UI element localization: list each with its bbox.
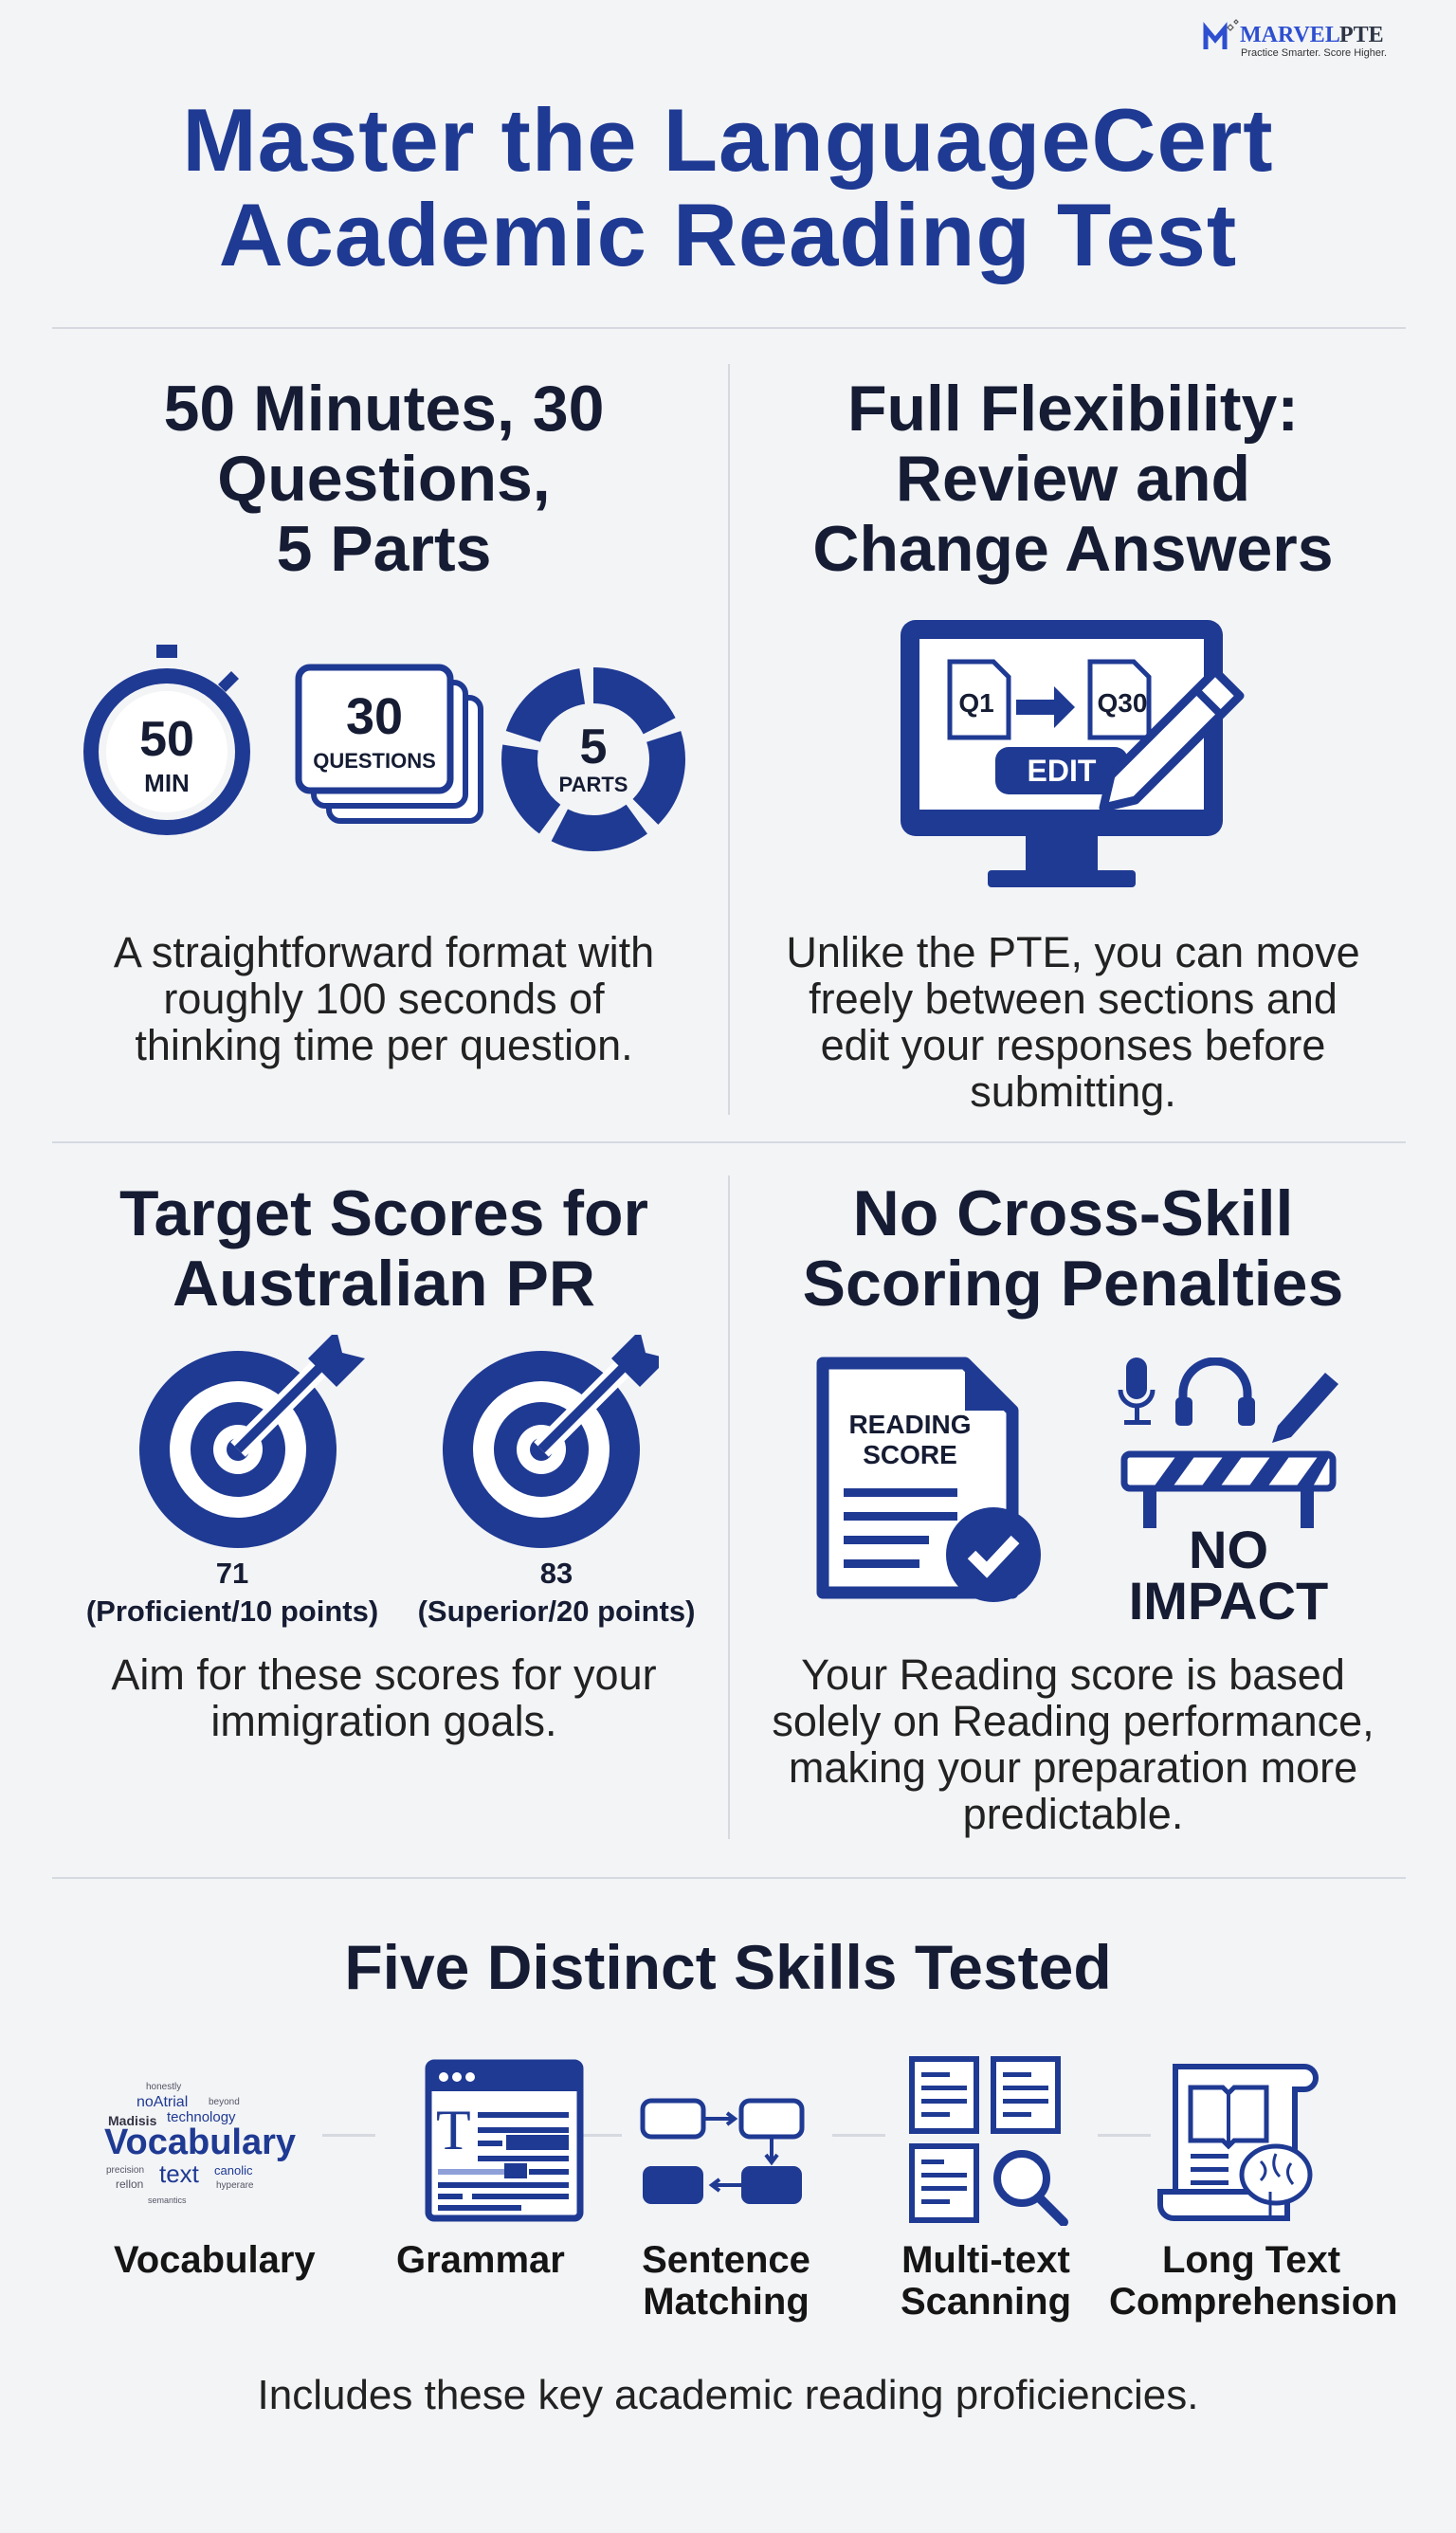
icon: reading score document: SCORE — [863, 1440, 957, 1469]
skills row: Matching — [643, 2281, 810, 2323]
icon: reading score document: READING — [848, 1410, 972, 1439]
icon: monitor — [901, 620, 1244, 887]
heading: format: 50 Minutes, 30 — [164, 373, 604, 445]
score labels: 71 — [216, 1557, 248, 1590]
icon: vocabulary word cloud: text — [159, 2159, 200, 2188]
logo: MARVEL — [1240, 23, 1340, 47]
text: format: A straightforward format with — [114, 928, 654, 976]
text: target scores: Aim for these scores for your — [111, 1650, 657, 1699]
icon: multi-text scanning — [909, 2056, 1068, 2226]
icon: vocabulary word cloud — [104, 2082, 296, 2205]
logo: Practice Smarter. Score Higher. — [1241, 47, 1387, 59]
icon: format icons — [83, 645, 685, 851]
text: flexibility: edit your responses before — [821, 1021, 1325, 1069]
heading: no penalties: Scoring Penalties — [803, 1248, 1343, 1320]
icon: monitor: Q1 — [958, 688, 994, 718]
icon: vocabulary word cloud: Madisis — [108, 2113, 157, 2128]
text: no impact — [1129, 1520, 1328, 1631]
skills row: Multi-text — [901, 2239, 1070, 2281]
text: target scores — [111, 1650, 657, 1745]
icon: monitor: Q30 — [1098, 688, 1147, 718]
skills row: Grammar — [396, 2239, 565, 2281]
heading: flexibility: Full Flexibility: — [847, 373, 1299, 445]
panel: no penalties — [772, 1177, 1374, 1838]
panel: target scores — [86, 1177, 695, 1745]
text: format: thinking time per question. — [135, 1021, 633, 1069]
icon: vocabulary word cloud: Vocabulary — [104, 2123, 296, 2162]
title: Master the LanguageCert — [182, 90, 1274, 190]
heading: format — [164, 373, 604, 585]
icon: format icons: 5 — [580, 720, 607, 774]
title — [182, 90, 1274, 284]
skills row: Scanning — [901, 2281, 1071, 2323]
heading: target scores: Target Scores for — [119, 1177, 648, 1249]
icon: vocabulary word cloud: hyperare — [216, 2180, 254, 2191]
text: no penalties: making your preparation more — [789, 1743, 1357, 1792]
heading: no penalties: No Cross-Skill — [853, 1177, 1293, 1249]
icon: targets — [139, 1335, 659, 1548]
text: no impact: NO — [1189, 1520, 1268, 1579]
icon: grammar: T — [436, 2099, 471, 2161]
score labels: (Proficient/10 points) — [86, 1595, 378, 1628]
icon: monitor: EDIT — [1028, 754, 1097, 788]
icon: format icons: 30 — [346, 688, 403, 745]
icon: vocabulary word cloud: canolic — [214, 2163, 253, 2178]
text: flexibility: Unlike the PTE, you can move — [786, 928, 1360, 976]
text: no penalties: solely on Reading performance, — [772, 1697, 1374, 1745]
heading: target scores — [119, 1177, 648, 1320]
skills row: Comprehension — [1109, 2281, 1397, 2323]
heading: format: 5 Parts — [277, 513, 491, 585]
score labels: 83 — [540, 1557, 573, 1590]
heading: flexibility: Change Answers — [812, 513, 1334, 585]
text: format — [114, 928, 654, 1069]
icon: no impact barrier — [1119, 1358, 1338, 1528]
heading: format: Questions, — [217, 443, 551, 515]
icon: long text comprehension — [1157, 2064, 1319, 2221]
icon: vocabulary word cloud: honestly — [146, 2082, 181, 2092]
icon: vocabulary word cloud: noAtrial — [136, 2094, 188, 2110]
text: flexibility: freely between sections and — [809, 975, 1338, 1023]
heading: no penalties — [803, 1177, 1343, 1320]
icon: vocabulary word cloud: technology — [167, 2109, 236, 2125]
panel: flexibility — [786, 373, 1360, 1116]
icon: format icons: MIN — [144, 769, 190, 797]
icon: grammar — [425, 2059, 584, 2222]
score labels — [86, 1557, 695, 1628]
heading: target scores: Australian PR — [173, 1248, 595, 1320]
title: Academic Reading Test — [219, 185, 1237, 284]
skills row: Long Text — [1162, 2239, 1340, 2281]
skills row — [104, 2056, 1397, 2323]
text: no penalties: predictable. — [963, 1790, 1183, 1838]
icon: format icons: PARTS — [559, 773, 628, 796]
icon: reading score document — [817, 1358, 1041, 1602]
panel: format — [83, 373, 685, 1069]
icon: vocabulary word cloud: semantics — [148, 2196, 187, 2205]
icon: sentence matching — [641, 2099, 804, 2204]
icon: vocabulary word cloud: precision — [106, 2165, 144, 2176]
footer text: Includes these key academic reading proficiencies. — [258, 2372, 1198, 2418]
text: no penalties — [772, 1650, 1374, 1838]
text: flexibility: submitting. — [970, 1067, 1176, 1116]
skill labels: Vocabulary — [114, 2239, 316, 2281]
text: no penalties: Your Reading score is based — [801, 1650, 1345, 1699]
heading: flexibility: Review and — [896, 443, 1250, 515]
skills row: Sentence — [642, 2239, 810, 2281]
heading: flexibility — [812, 373, 1334, 585]
icon: format icons: 50 — [139, 712, 194, 767]
text: format: roughly 100 seconds of — [163, 975, 605, 1023]
icon: vocabulary word cloud: rellon — [116, 2178, 143, 2191]
heading: skills: Five Distinct Skills Tested — [344, 1932, 1112, 2002]
text: no impact: IMPACT — [1129, 1571, 1328, 1631]
logo — [1204, 19, 1387, 59]
icon: format icons: QUESTIONS — [313, 749, 436, 773]
text: flexibility — [786, 928, 1360, 1116]
icon: vocabulary word cloud: beyond — [209, 2097, 240, 2107]
text: target scores: immigration goals. — [210, 1697, 557, 1745]
logo: PTE — [1339, 23, 1384, 47]
score labels: (Superior/20 points) — [418, 1595, 695, 1628]
